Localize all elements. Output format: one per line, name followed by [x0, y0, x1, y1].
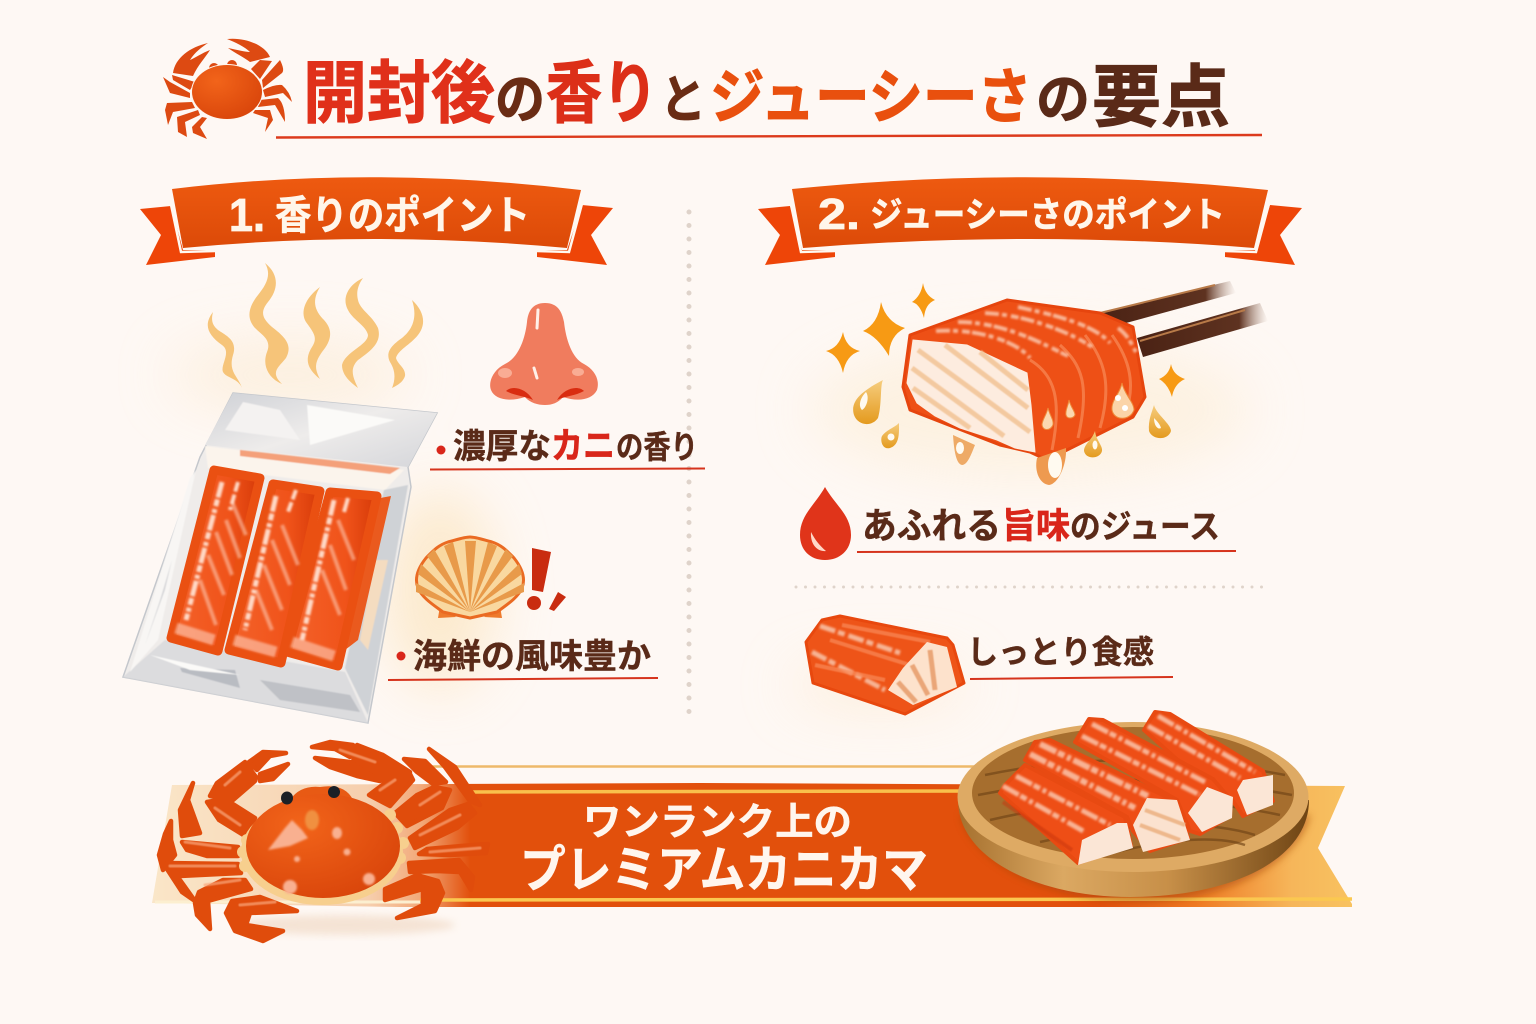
point: rich seafood flavor: 海鮮の風味豊か — [413, 638, 651, 676]
section ribbon 1 — [140, 177, 613, 265]
section ribbon 2: 2. — [818, 190, 860, 239]
title: 開封後 — [303, 56, 495, 132]
section ribbon 2: ジューシーさのポイント — [870, 196, 1225, 235]
bottom banner text: ワンランク上の — [583, 802, 852, 844]
title: の — [1036, 70, 1090, 130]
icon: juice drops — [853, 380, 1171, 485]
title underline — [276, 135, 1262, 138]
crab stick back — [1144, 712, 1273, 816]
title: と — [660, 72, 706, 130]
crab stick 1 — [171, 470, 260, 651]
icon: moist crab stick piece — [806, 616, 964, 714]
icon: exclamation marks — [527, 548, 566, 611]
soft watercolor washes — [170, 340, 1250, 707]
icon: sparkles — [826, 283, 1185, 397]
point: rich crab aroma — [430, 425, 705, 470]
crab stick 2 — [229, 484, 320, 663]
point: overflowing umami juice: のジュース — [1070, 508, 1220, 545]
bottom banner text: プレミアムカニカマ — [520, 842, 928, 898]
bottom banner text — [520, 802, 928, 898]
point: rich crab aroma: カニ — [551, 425, 615, 466]
point: rich crab aroma: の香り — [616, 429, 698, 465]
icon: nose — [490, 303, 598, 405]
crab stick 3 — [287, 492, 377, 666]
left legs — [159, 783, 241, 901]
right claw — [312, 742, 413, 806]
title: 要点 — [1092, 60, 1230, 136]
crab stick second — [1025, 740, 1190, 852]
section ribbon 2 — [758, 177, 1302, 265]
section ribbon 1: 香りのポイント — [275, 194, 530, 238]
section ribbon 1: 1. — [229, 189, 265, 241]
title: ジューシーさ — [710, 64, 1032, 131]
dotted dividers — [689, 212, 1270, 716]
point: moist texture: しっとり食感 — [967, 634, 1154, 670]
title crab icon — [163, 39, 292, 139]
point: overflowing umami juice: あふれる — [862, 505, 1001, 546]
icon: red drop — [800, 487, 851, 560]
illustration: large crab — [159, 742, 488, 941]
illustration: wooden plate of crab sticks — [958, 712, 1310, 902]
icon: chopsticks — [1097, 281, 1268, 357]
left claw — [207, 752, 288, 836]
icon: juicy crab stick bite — [903, 300, 1145, 460]
title: の — [495, 70, 545, 130]
right legs — [395, 749, 480, 848]
title: 香り — [546, 56, 658, 132]
crab stick third — [1075, 719, 1233, 834]
bottom banner — [152, 766, 1352, 907]
icon: vacuum bag of crab sticks — [123, 393, 437, 723]
icon: aroma steam — [208, 263, 423, 388]
point: rich crab aroma: 濃厚な — [453, 428, 551, 466]
point: overflowing umami juice: 旨味 — [1002, 507, 1070, 546]
point: overflowing umami juice — [857, 505, 1236, 552]
crab stick front — [1000, 765, 1133, 865]
icon: scallop shell — [416, 537, 524, 618]
title — [303, 56, 1230, 136]
